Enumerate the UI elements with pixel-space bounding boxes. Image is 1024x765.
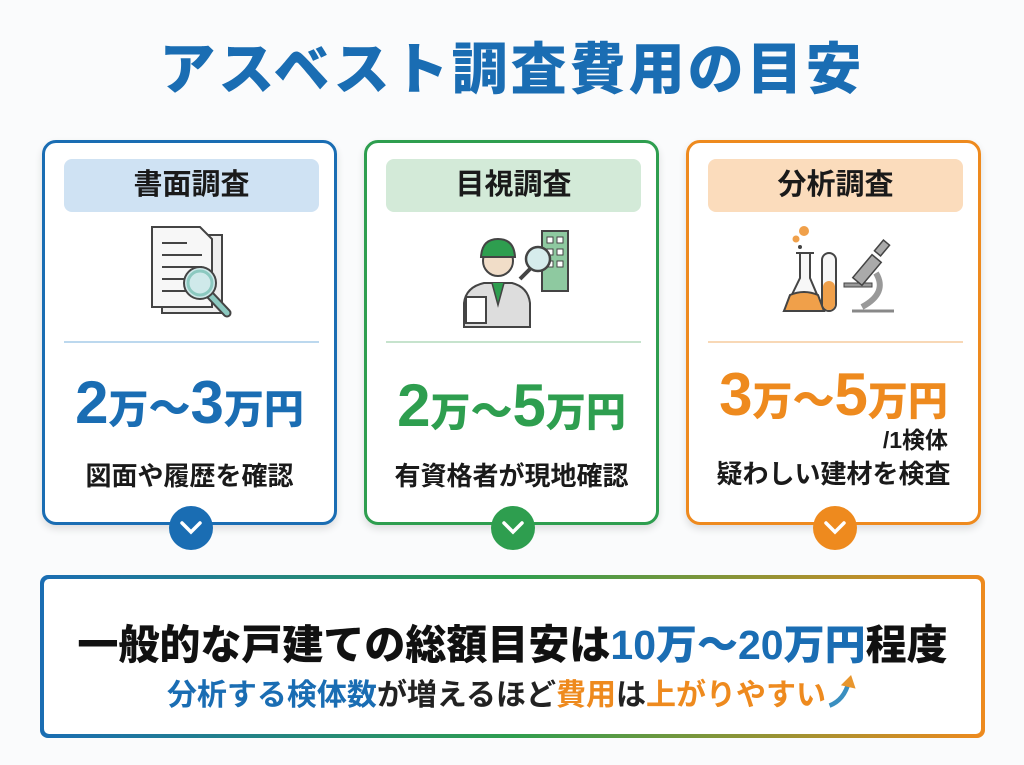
summary headline: 一般的な戸建ての総額目安は10万～20万円程度 [77, 622, 948, 668]
icon: document with magnifier [151, 226, 232, 318]
icon: flask and microscope [782, 226, 894, 312]
price: 2万～5万円 [397, 372, 626, 439]
heading: 書面調査 [64, 159, 319, 212]
price: 3万～5万円 [719, 361, 948, 428]
icon: chevron [491, 506, 535, 550]
panel: summary [40, 575, 985, 738]
icon: inspector [463, 230, 569, 328]
panel: analysis survey [686, 140, 981, 525]
heading: 目視調査: 目視調査 [455, 169, 572, 201]
description: 図面や履歴を確認 [85, 461, 294, 491]
icon: chevron [813, 506, 857, 550]
unit note: /1検体 [883, 427, 948, 453]
heading: 目視調査 [386, 159, 641, 212]
title: アスベスト調査費用の目安 [159, 38, 865, 101]
price: 2万～3万円 [75, 369, 304, 436]
panel: visual survey [364, 140, 659, 525]
description: 疑わしい建材を検査 [716, 459, 950, 489]
icon: chevron [169, 506, 213, 550]
summary note: 分析する検体数が増えるほど費用は上がりやすい [167, 679, 826, 712]
panel: document survey [42, 140, 337, 525]
description: 有資格者が現地確認 [394, 461, 628, 491]
heading: 分析調査 [708, 159, 963, 212]
heading: 分析調査: 分析調査 [777, 169, 894, 201]
heading: 書面調査: 書面調査 [133, 169, 250, 201]
